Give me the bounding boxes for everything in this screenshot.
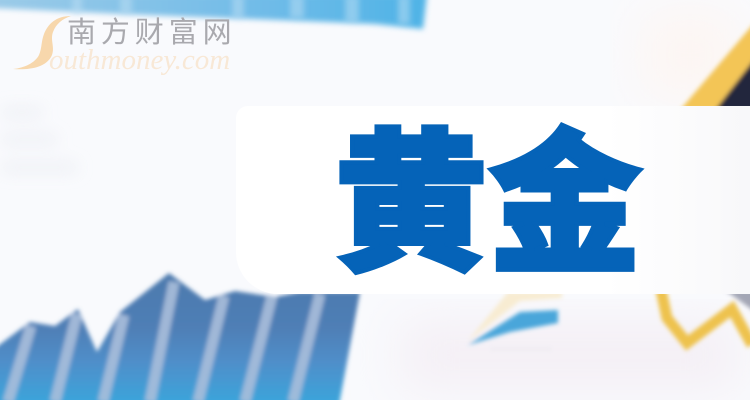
small blue and yellow wedge (468, 292, 562, 351)
logo: southmoney (14, 16, 237, 76)
top blue bar chart (0, 0, 427, 29)
faint blurred text lines (2, 108, 77, 172)
blue area chart (0, 273, 360, 400)
white title panel (236, 106, 750, 294)
yellow band and dark corner (680, 22, 750, 110)
icon: S swoosh (14, 16, 71, 70)
title: 黄金 (334, 119, 642, 291)
logo chinese name: 南方财富网 (67, 17, 237, 49)
logo domain: outhmoney.com (49, 44, 230, 76)
yellow zigzag line (661, 290, 750, 345)
